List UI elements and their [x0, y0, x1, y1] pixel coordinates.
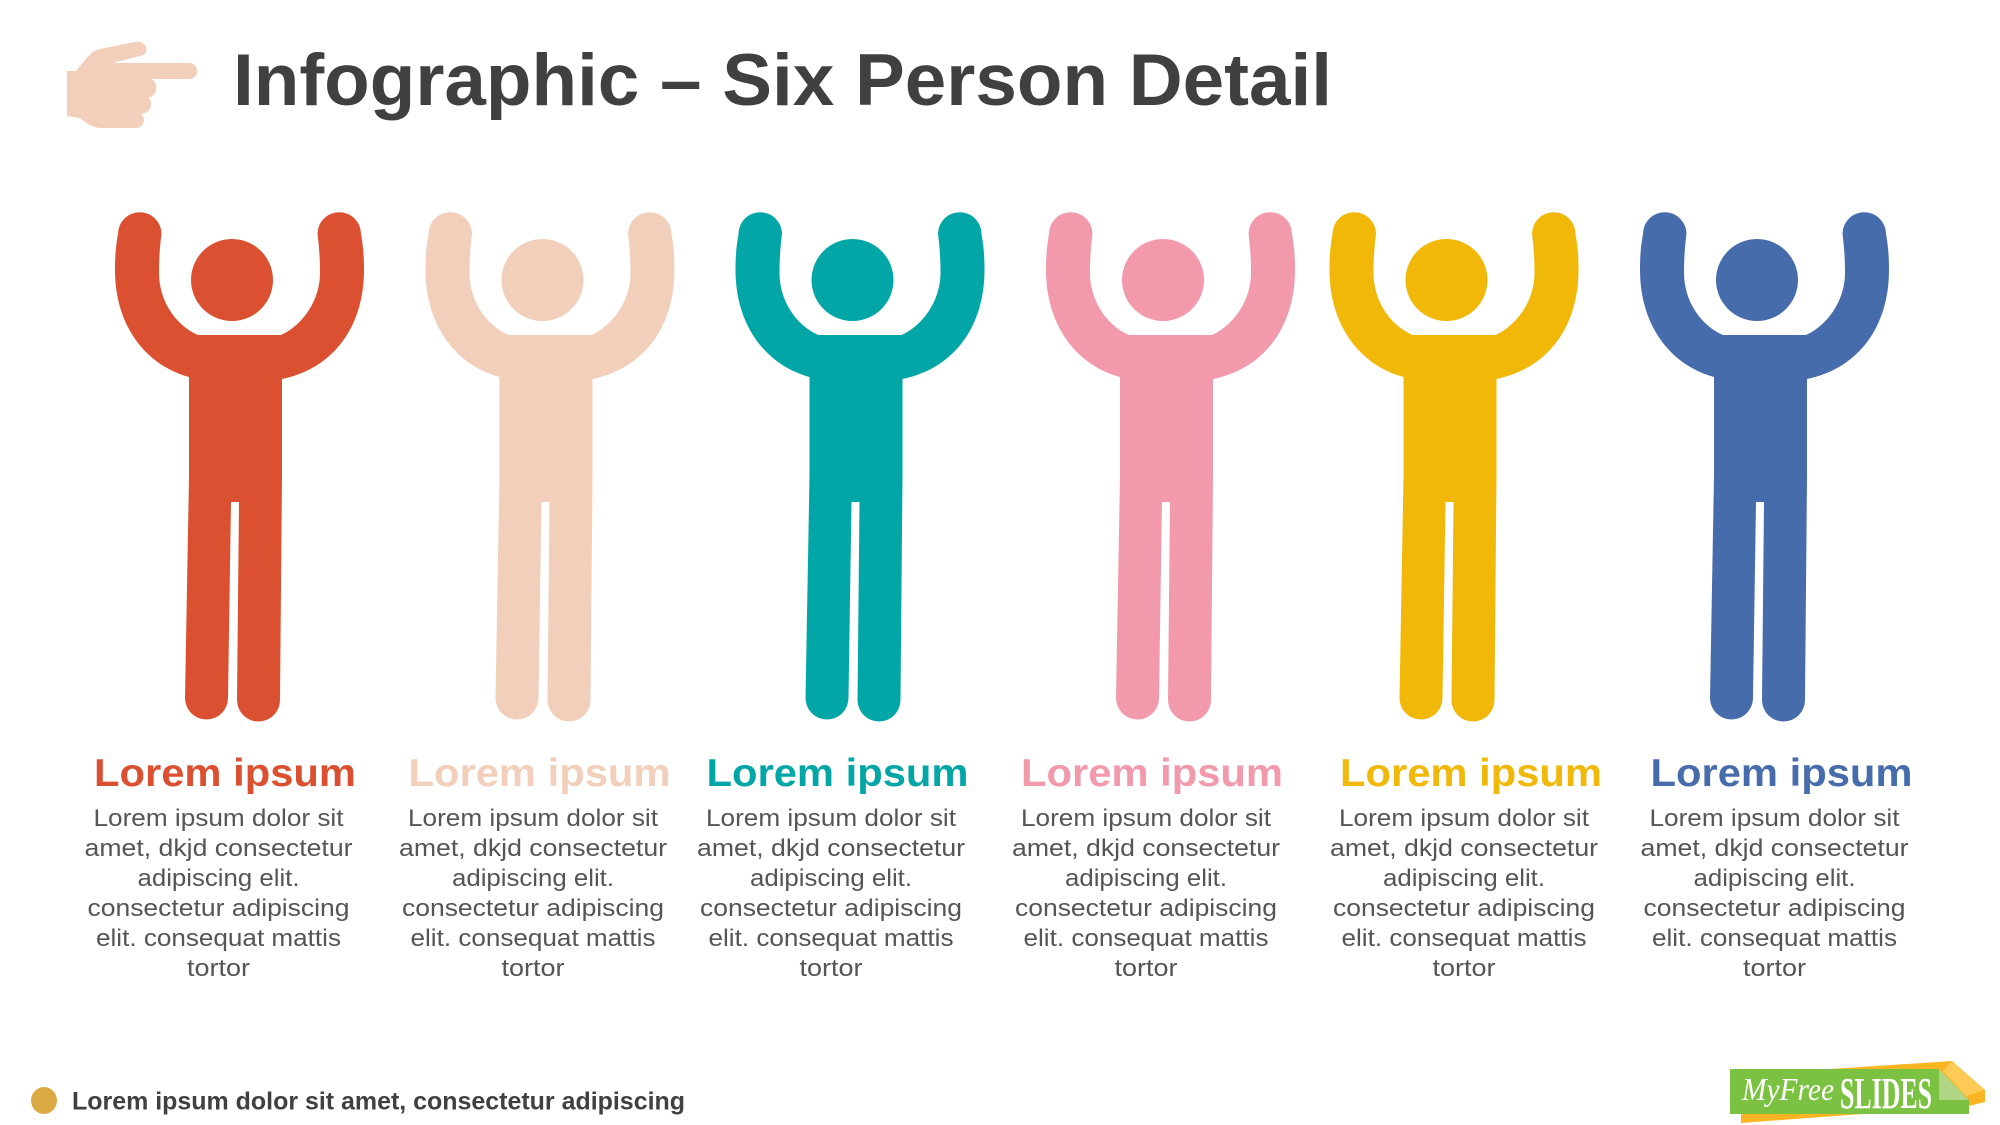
body text: pink — [1012, 805, 1280, 982]
figure: pink person — [1046, 212, 1295, 721]
body text: teal: elit. consequat mattis — [708, 925, 954, 952]
body text: peach: consectetur adipiscing — [402, 895, 664, 922]
figure: blue person — [1640, 212, 1889, 721]
heading: blue: Lorem ipsum — [1650, 752, 1912, 795]
figure: red person — [115, 212, 364, 721]
heading: red: Lorem ipsum — [94, 752, 356, 795]
footer text: Lorem ipsum dolor sit amet, consectetur adipiscing — [72, 1088, 685, 1116]
body text: blue: elit. consequat mattis — [1652, 925, 1897, 952]
heading: teal: Lorem ipsum — [706, 752, 968, 795]
body text: yellow: Lorem ipsum dolor sit — [1339, 805, 1589, 832]
body text: yellow: consectetur adipiscing — [1333, 895, 1595, 922]
logo: MyFreeSlides: SLIDES — [1840, 1069, 1932, 1118]
body text: blue: adipiscing elit. — [1694, 865, 1856, 892]
body text: red — [84, 805, 353, 982]
body text: blue: consectetur adipiscing — [1644, 895, 1906, 922]
body text: yellow — [1330, 805, 1598, 982]
body text: peach: amet, dkjd consectetur — [399, 835, 667, 862]
body text: yellow: elit. consequat mattis — [1342, 925, 1586, 952]
figure: yellow person — [1330, 212, 1578, 721]
person column: teal — [697, 212, 984, 982]
heading: peach: Lorem ipsum — [408, 752, 670, 795]
body text: peach: elit. consequat mattis — [410, 925, 656, 952]
body text: red: consectetur adipiscing — [88, 895, 350, 922]
body text: peach: Lorem ipsum dolor sit — [408, 805, 658, 832]
body text: blue: amet, dkjd consectetur — [1640, 835, 1909, 862]
body text: pink: adipiscing elit. — [1065, 865, 1227, 892]
body text: pink: elit. consequat mattis — [1024, 925, 1268, 952]
body text: yellow: tortor — [1432, 955, 1496, 982]
body text: red: Lorem ipsum dolor sit — [94, 805, 344, 832]
body text: peach: adipiscing elit. — [452, 865, 614, 892]
body text: yellow: adipiscing elit. — [1383, 865, 1545, 892]
body text: teal: tortor — [800, 955, 863, 982]
person column: peach — [399, 212, 674, 982]
heading: pink: Lorem ipsum — [1021, 752, 1283, 795]
heading: yellow: Lorem ipsum — [1340, 752, 1602, 795]
figure: teal person — [736, 212, 984, 721]
body text: pink: consectetur adipiscing — [1015, 895, 1277, 922]
person column: pink — [1012, 212, 1295, 982]
body text: pink: tortor — [1114, 955, 1178, 982]
body text: teal: Lorem ipsum dolor sit — [706, 805, 956, 832]
body text: yellow: amet, dkjd consectetur — [1330, 835, 1598, 862]
body text: blue: tortor — [1743, 955, 1806, 982]
figure: peach person — [426, 212, 674, 721]
body text: red: amet, dkjd consectetur — [84, 835, 353, 862]
body text: teal — [697, 805, 965, 982]
icon: pointing hand — [67, 42, 197, 128]
body text: peach: tortor — [502, 955, 565, 982]
body text: red: adipiscing elit. — [138, 865, 300, 892]
person column: red — [84, 212, 364, 982]
body text: peach — [399, 805, 667, 982]
body text: red: elit. consequat mattis — [96, 925, 341, 952]
person column: yellow — [1330, 212, 1602, 982]
footer bullet — [31, 1087, 57, 1114]
body text: red: tortor — [187, 955, 250, 982]
body text: blue — [1640, 805, 1909, 982]
body text: teal: adipiscing elit. — [750, 865, 912, 892]
title: Infographic – Six Person Detail — [233, 40, 1332, 121]
body text: teal: amet, dkjd consectetur — [697, 835, 965, 862]
body text: blue: Lorem ipsum dolor sit — [1650, 805, 1900, 832]
logo: MyFreeSlides — [1730, 1061, 1985, 1123]
body text: pink: Lorem ipsum dolor sit — [1021, 805, 1271, 832]
logo: MyFreeSlides: MyFree — [1741, 1071, 1834, 1107]
body text: pink: amet, dkjd consectetur — [1012, 835, 1280, 862]
person column: blue — [1640, 212, 1912, 982]
body text: teal: consectetur adipiscing — [700, 895, 962, 922]
